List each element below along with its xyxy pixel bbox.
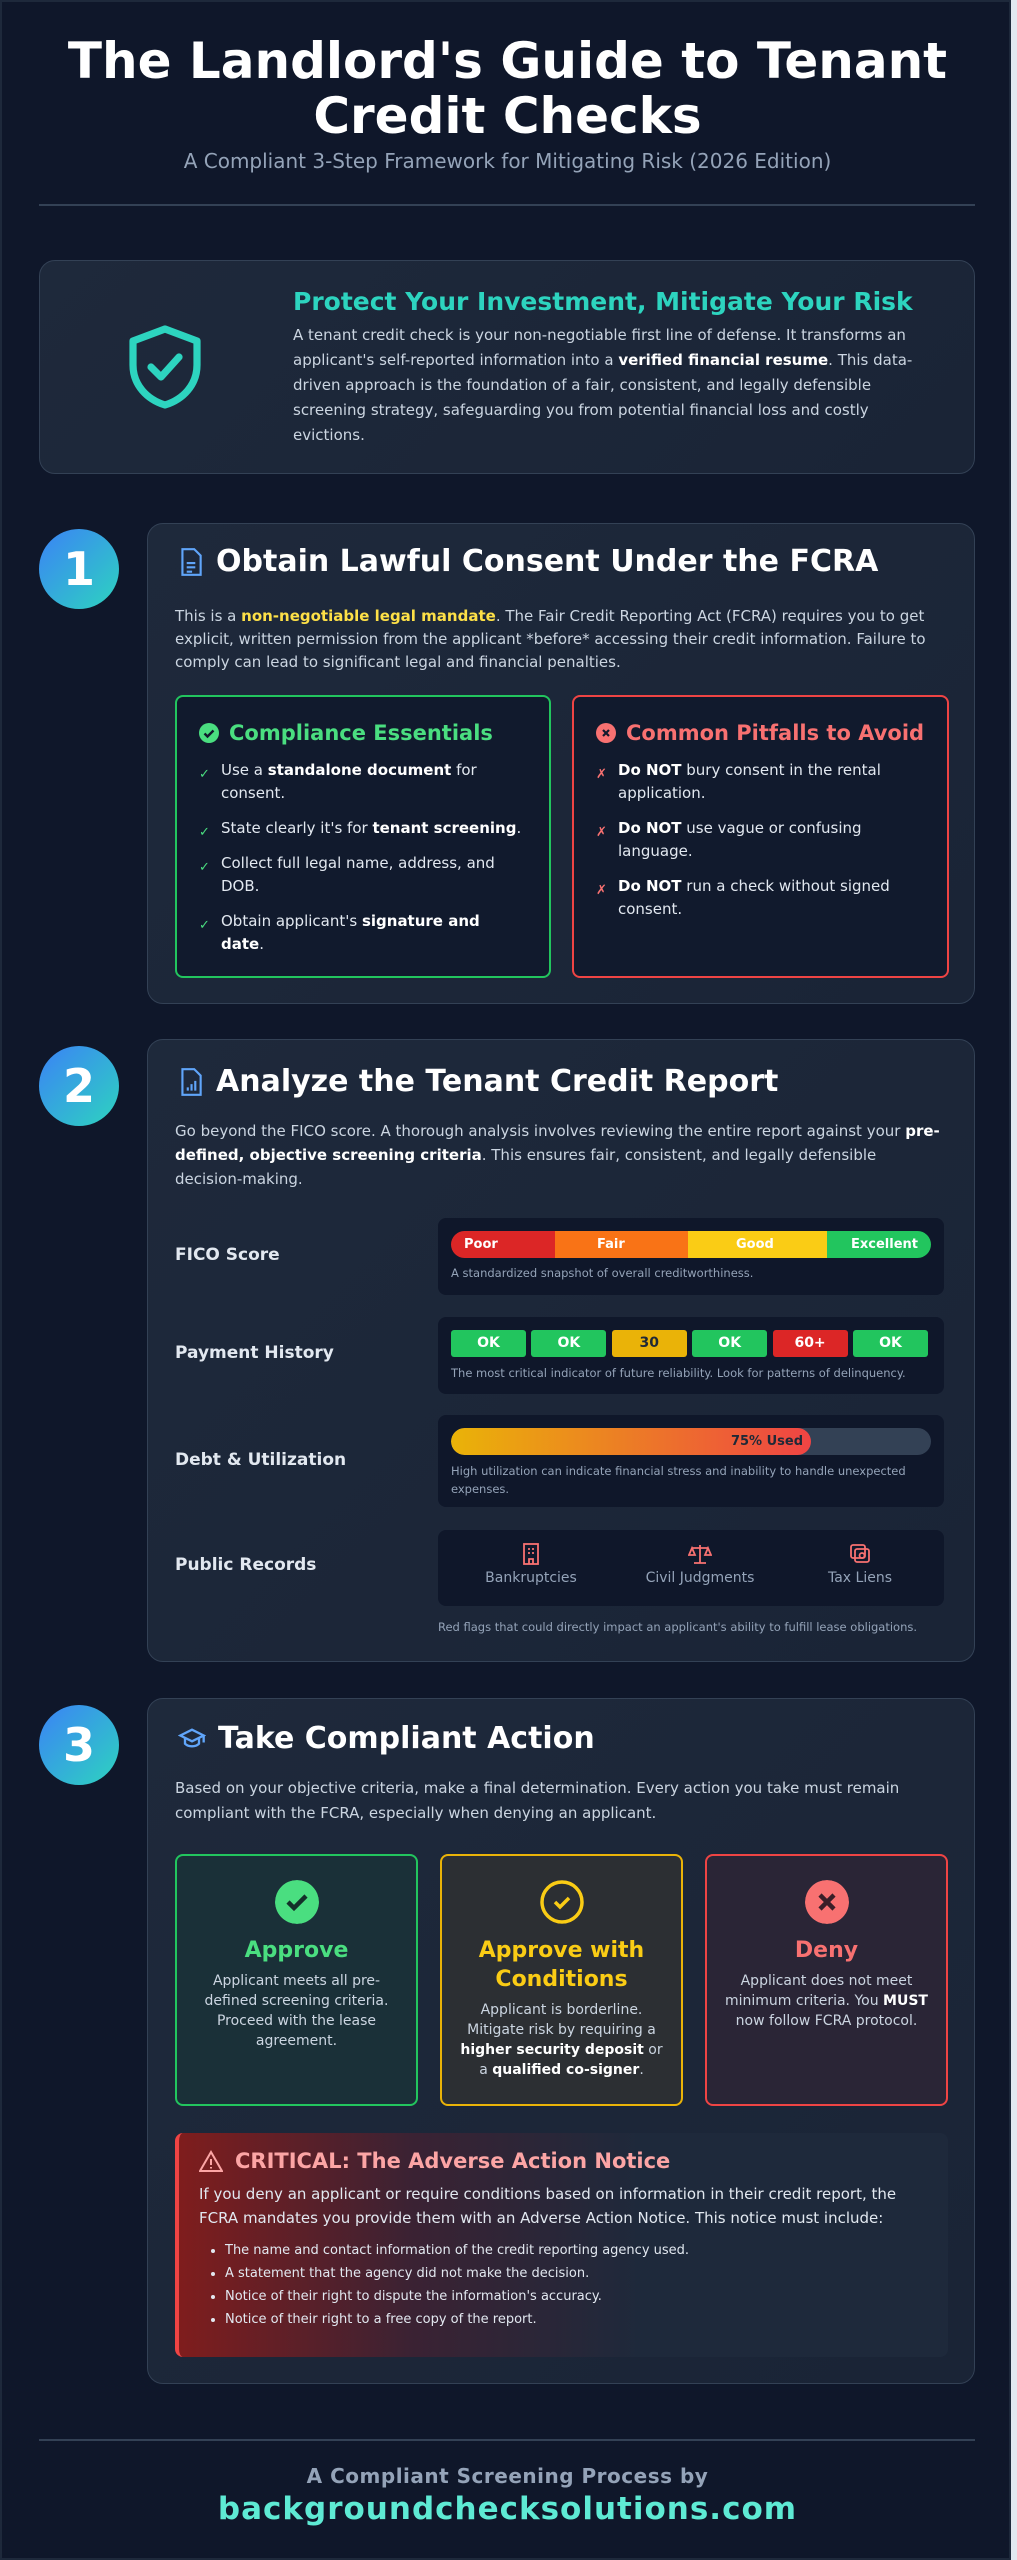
card: deny: Applicant does not meet minimum criteria. You MUST now follow FCRA protocol. [725, 1973, 928, 2029]
step 2 text: Go beyond the FICO score. A thorough analysis involves reviewing the entire report against your pre-defined, objective screening criteria. This ensures fair, consistent, and legally defensible decision-making. [175, 1122, 940, 1188]
callout: adverse action notice: The name and contact information of the credit reporting agency used. [225, 2243, 689, 2258]
callout: adverse action notice: CRITICAL: The Adverse Action Notice [235, 2149, 670, 2173]
row: public records: Public Records [175, 1555, 316, 1575]
footer: backgroundchecksolutions.com [218, 2491, 797, 2527]
icon: bankruptcies [485, 1543, 577, 1586]
panel: step 1 [147, 523, 975, 1004]
icon: civil judgments: Civil Judgments [646, 1570, 754, 1586]
heading 2: Analyze the Tenant Credit Report [216, 1064, 778, 1099]
chart: payment chips: OK [879, 1335, 902, 1351]
callout: adverse action notice: Notice of their right to a free copy of the report. [225, 2312, 537, 2327]
chart: FICO bar: Good [736, 1237, 774, 1252]
step 1 text: This is a non-negotiable legal mandate. The Fair Credit Reporting Act (FCRA) requires you to get explicit, written permission from the applicant *before* accessing their credit information. Failure to comply can lead to significant legal and financial penalties. [175, 607, 926, 671]
box: common pitfalls: ✗ [596, 825, 607, 840]
icon: civil judgments [646, 1545, 754, 1586]
row: FICO: FICO Score [175, 1245, 280, 1265]
chart: FICO bar: Poor [464, 1237, 498, 1252]
card: deny [705, 1854, 948, 2106]
callout: adverse action notice: A statement that the agency did not make the decision. [225, 2266, 589, 2281]
card: deny: Deny [795, 1938, 858, 1963]
box: compliance essentials: ✓ [199, 767, 210, 782]
card: approve with conditions: Applicant is borderline. Mitigate risk by requiring a higher security deposit or a qualified co-signer. [460, 2002, 663, 2078]
badge 1 [39, 529, 119, 609]
box: compliance essentials: ✓ [199, 918, 210, 933]
title: Credit Checks [313, 87, 702, 145]
icon: bankruptcies: Bankruptcies [485, 1570, 577, 1586]
box: compliance essentials: Compliance Essentials [229, 721, 493, 745]
callout: adverse action notice [175, 2133, 948, 2357]
chart: payment chips: OK [718, 1335, 741, 1351]
chart: FICO bar [451, 1231, 931, 1258]
chart: payment chips: OK [477, 1335, 500, 1351]
box: compliance essentials: ✓ [199, 860, 210, 875]
row: payment history: Payment History [175, 1343, 334, 1363]
box: compliance essentials: Use a standalone document for consent. [221, 761, 477, 802]
box: common pitfalls: Common Pitfalls to Avoid [626, 721, 924, 745]
card: approve with conditions: Approve with Conditions [479, 1938, 644, 1992]
card: approve: Approve [245, 1938, 348, 1963]
box: compliance essentials: Collect full legal name, address, and DOB. [221, 854, 495, 895]
chart: FICO bar: Excellent [851, 1237, 918, 1252]
badge 1: 1 [63, 542, 95, 596]
box: common pitfalls: Do NOT run a check without signed consent. [618, 877, 890, 918]
panel: step 3 [147, 1698, 975, 2384]
badge 3 [39, 1705, 119, 1785]
panel: step 2: A standardized snapshot of overall creditworthiness. [451, 1266, 753, 1280]
badge 3: 3 [63, 1718, 95, 1772]
box: common pitfalls: Do NOT use vague or confusing language. [618, 819, 862, 860]
chart: utilization bar: 75% Used [731, 1434, 803, 1449]
title: The Landlord's Guide to Tenant [68, 32, 947, 90]
heading 3: Take Compliant Action [218, 1721, 595, 1756]
icon: tax liens [828, 1544, 892, 1586]
chart: FICO bar: Fair [597, 1237, 625, 1252]
card: approve with conditions [440, 1854, 683, 2106]
subtitle: A Compliant 3-Step Framework for Mitigating Risk (2026 Edition) [184, 149, 831, 173]
box: compliance essentials: Obtain applicant's signature and date. [221, 912, 480, 953]
panel: intro [39, 260, 975, 474]
footer [218, 2464, 797, 2527]
row: debt: Debt & Utilization [175, 1450, 346, 1470]
card: approve: Applicant meets all pre-defined screening criteria. Proceed with the lease agreement. [205, 1973, 388, 2049]
step 3 text: Based on your objective criteria, make a final determination. Every action you take must remain compliant with the FCRA, especially when denying an applicant. [175, 1779, 899, 1822]
badge 2: 2 [63, 1059, 95, 1113]
panel: step 2 [147, 1039, 975, 1662]
chart: payment chips [451, 1330, 928, 1357]
chart: payment chips: 30 [640, 1335, 659, 1351]
heading 1: Obtain Lawful Consent Under the FCRA [216, 544, 878, 579]
card: approve [175, 1854, 418, 2106]
intro text: A tenant credit check is your non-negotiable first line of defense. It transforms an applicant's self-reported information into a verified financial resume. This data-driven approach is the foundation of a fair, consistent, and legally defensible screening strategy, safeguarding you from potential financial loss and costly evictions. [293, 326, 912, 444]
box: compliance essentials: State clearly it's for tenant screening. [221, 819, 521, 837]
box: common pitfalls [572, 695, 949, 978]
box: compliance essentials [175, 695, 551, 978]
chart: payment chips: OK [558, 1335, 580, 1351]
icon: tax liens: Tax Liens [828, 1570, 892, 1586]
panel: step 2: High utilization can indicate financial stress and inability to handle unexpected expenses. [451, 1464, 906, 1496]
box: common pitfalls: ✗ [596, 883, 607, 898]
chart: payment chips: 60+ [794, 1335, 826, 1351]
box: compliance essentials: ✓ [199, 825, 210, 840]
box: common pitfalls: ✗ [596, 767, 607, 782]
icon: shield [129, 325, 201, 409]
badge 2 [39, 1046, 119, 1126]
intro heading: Protect Your Investment, Mitigate Your Risk [293, 287, 913, 316]
callout: adverse action notice: If you deny an applicant or require conditions based on information in their credit report, the FCRA mandates you provide them with an Adverse Action Notice. This notice must include: [199, 2185, 896, 2227]
caption: public records: Red flags that could directly impact an applicant's ability to fulfill lease obligations. [438, 1620, 917, 1634]
title [68, 32, 947, 145]
panel: step 2: The most critical indicator of future reliability. Look for patterns of delinquency. [451, 1366, 906, 1380]
callout: adverse action notice: Notice of their right to dispute the information's accuracy. [225, 2289, 602, 2304]
chart: utilization bar [451, 1428, 931, 1455]
footer: A Compliant Screening Process by [307, 2464, 708, 2488]
box: common pitfalls: Do NOT bury consent in the rental application. [618, 761, 881, 802]
